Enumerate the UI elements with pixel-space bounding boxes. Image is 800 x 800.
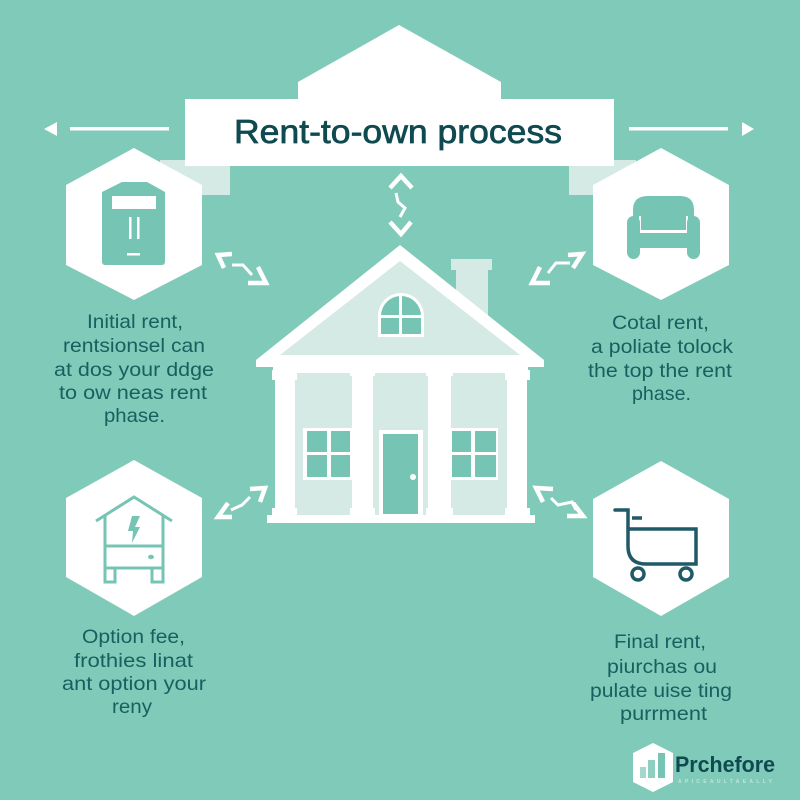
left shadow connector xyxy=(160,160,230,195)
text: option fee: reny xyxy=(112,696,152,718)
panel: total rent xyxy=(588,148,733,405)
text: total rent: Cotal rent, xyxy=(612,312,709,334)
logo tagline: APICEAULTAEALLY xyxy=(678,779,773,785)
left window xyxy=(303,428,353,480)
arrow: top left xyxy=(218,254,266,283)
arrow: top right xyxy=(532,254,582,283)
text: total rent xyxy=(588,312,733,405)
text: initial rent: at dos your ddge xyxy=(54,359,214,381)
text: initial rent: phase. xyxy=(104,405,165,427)
text: initial rent xyxy=(54,311,214,427)
text: total rent: a poliate tolock xyxy=(591,336,733,358)
arrow: title to house xyxy=(390,176,412,234)
hexagon with house icon xyxy=(66,460,202,616)
title: Rent-to-own process xyxy=(234,113,562,150)
text: initial rent: Initial rent, xyxy=(87,311,183,333)
title banner xyxy=(185,25,614,166)
logo xyxy=(633,743,775,792)
dormer window xyxy=(378,293,424,337)
text: option fee: ant option your xyxy=(62,673,207,695)
right window xyxy=(449,428,498,480)
logo hexagon icon xyxy=(633,743,673,792)
text: final rent xyxy=(590,631,732,725)
arrow: bottom left xyxy=(218,488,265,517)
chimney xyxy=(451,259,492,318)
gable xyxy=(280,261,520,355)
base xyxy=(267,515,535,523)
text: option fee: frothies linat xyxy=(74,650,194,672)
house illustration xyxy=(256,245,544,523)
logo name: Prchefore xyxy=(675,752,775,777)
text: initial rent: to ow neas rent xyxy=(59,382,208,404)
text: total rent: the top the rent xyxy=(588,360,733,382)
text: final rent: pulate uise ting xyxy=(590,680,732,702)
text: final rent: piurchas ou xyxy=(607,656,717,678)
panel: option fee xyxy=(62,460,207,718)
text: final rent: purrment xyxy=(620,703,708,725)
arrow: bottom right xyxy=(536,488,583,516)
text: option fee xyxy=(62,626,207,718)
hexagon with sofa icon xyxy=(593,148,729,300)
hexagon with contract icon xyxy=(66,148,202,300)
panel: initial rent xyxy=(54,148,214,427)
beam xyxy=(273,355,528,373)
text: final rent: Final rent, xyxy=(614,631,706,653)
banner shape xyxy=(185,25,614,166)
columns xyxy=(272,370,530,516)
text: option fee: Option fee, xyxy=(82,626,185,648)
text: total rent: phase. xyxy=(632,383,691,405)
hexagon with cart icon xyxy=(593,461,729,616)
arrow: right decorative line xyxy=(629,122,754,136)
text: initial rent: rentsionsel can xyxy=(63,335,205,357)
panel: final rent xyxy=(590,461,732,725)
roof xyxy=(256,245,544,367)
right shadow connector xyxy=(569,160,636,195)
door xyxy=(379,430,423,515)
arrow: left decorative line xyxy=(44,122,169,136)
walls xyxy=(295,373,508,515)
